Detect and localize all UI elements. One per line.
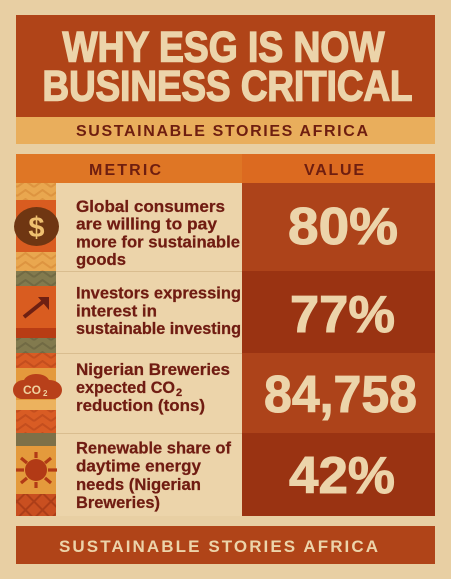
decorative stripe column xyxy=(16,183,56,516)
metric text: consumers: more for sustainable xyxy=(76,234,240,252)
value cell: 84,758 xyxy=(242,353,435,433)
value cell: 80%: 80% xyxy=(288,198,398,256)
footer banner: SUSTAINABLE STORIES AFRICA xyxy=(59,537,378,556)
metric text: consumers: are willing to pay xyxy=(76,216,218,234)
metric column background xyxy=(56,183,242,516)
metric text: CO2 reduction: reduction (tons) xyxy=(76,397,205,415)
table header: value: VALUE xyxy=(304,162,364,179)
metric text: investors: Investors expressing xyxy=(76,284,241,302)
metric text: CO2 reduction: 2 xyxy=(176,387,182,399)
icon: CO2 cloud: CO xyxy=(23,383,41,397)
metric text: renewable share: needs (Nigerian xyxy=(76,476,201,494)
metric text: investors xyxy=(76,284,241,338)
table header: value xyxy=(242,154,435,183)
subtitle band: SUSTAINABLE STORIES AFRICA xyxy=(76,123,368,140)
subtitle band xyxy=(16,117,435,144)
value cell: 42%: 42% xyxy=(289,447,395,505)
title banner xyxy=(16,15,435,117)
metric text: investors: sustainable investing xyxy=(76,320,241,338)
icon: dollar coin: $ xyxy=(28,212,45,244)
metric text: CO2 reduction: Nigerian Breweries xyxy=(76,361,230,379)
metric text: renewable share: Renewable share of xyxy=(76,440,231,458)
value cell: 84,758: 84,758 xyxy=(264,366,417,424)
metric text: consumers xyxy=(76,198,240,269)
icon: sun xyxy=(16,452,57,488)
metric text: renewable share xyxy=(76,440,231,512)
icon: dollar coin xyxy=(14,207,59,246)
row divider lines xyxy=(56,272,242,434)
metric text: investors: interest in xyxy=(76,302,157,320)
footer banner xyxy=(16,526,435,564)
value cell: 42% xyxy=(242,433,435,516)
table header: metric xyxy=(16,154,242,183)
metric text: CO2 reduction: expected CO xyxy=(76,379,175,397)
icon: rising arrow xyxy=(24,297,49,317)
metric text: consumers: Global consumers xyxy=(76,198,225,216)
icon: CO2 cloud: 2 xyxy=(43,389,48,398)
title line 1: WHY ESG IS NOW xyxy=(62,24,385,72)
icon: CO2 cloud xyxy=(13,374,62,399)
metric text: consumers: goods xyxy=(76,251,126,269)
metric text: renewable share: daytime energy xyxy=(76,458,202,476)
metric text: CO2 reduction xyxy=(76,361,230,415)
value cell: 80% xyxy=(242,183,435,271)
table header: metric: METRIC xyxy=(89,162,161,179)
value cell: 77%: 77% xyxy=(290,286,395,344)
value cell: 77% xyxy=(242,271,435,353)
metric text: renewable share: Breweries) xyxy=(76,494,160,512)
